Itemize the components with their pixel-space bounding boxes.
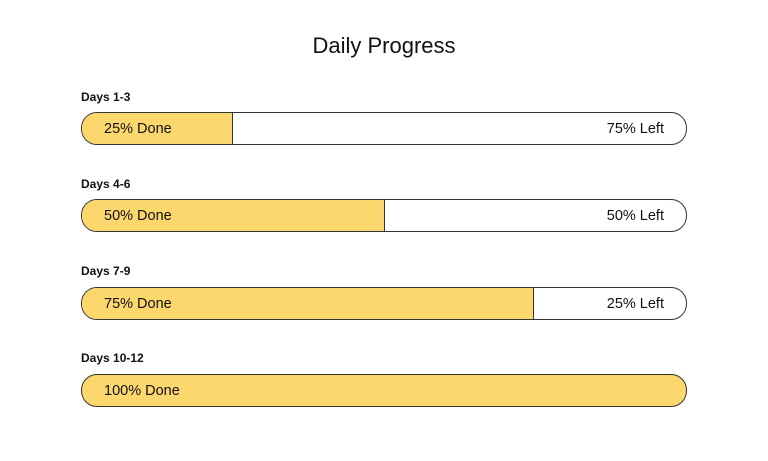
bar: days 7-9: 75% Done bbox=[104, 296, 172, 312]
bar: days 10-12: 100% Done bbox=[104, 383, 180, 399]
bar: days 1-3: 25% Done bbox=[104, 121, 172, 137]
bar: days 1-3: 75% Left bbox=[607, 121, 664, 137]
title: Daily Progress bbox=[312, 33, 456, 58]
bar: days 4-6 bbox=[81, 199, 687, 232]
bar: days 7-9 bbox=[81, 287, 687, 320]
bar: days 4-6: 50% Left bbox=[607, 208, 664, 224]
label: days 4-6: Days 4-6 bbox=[81, 177, 130, 191]
label: days 1-3: Days 1-3 bbox=[81, 90, 130, 104]
bar: days 4-6: 50% Done bbox=[104, 208, 172, 224]
bar: days 7-9: 25% Left bbox=[607, 296, 664, 312]
bar: days 10-12 bbox=[81, 374, 687, 407]
bar: days 1-3 bbox=[81, 112, 687, 145]
label: days 10-12: Days 10-12 bbox=[81, 351, 144, 365]
label: days 7-9: Days 7-9 bbox=[81, 264, 130, 278]
